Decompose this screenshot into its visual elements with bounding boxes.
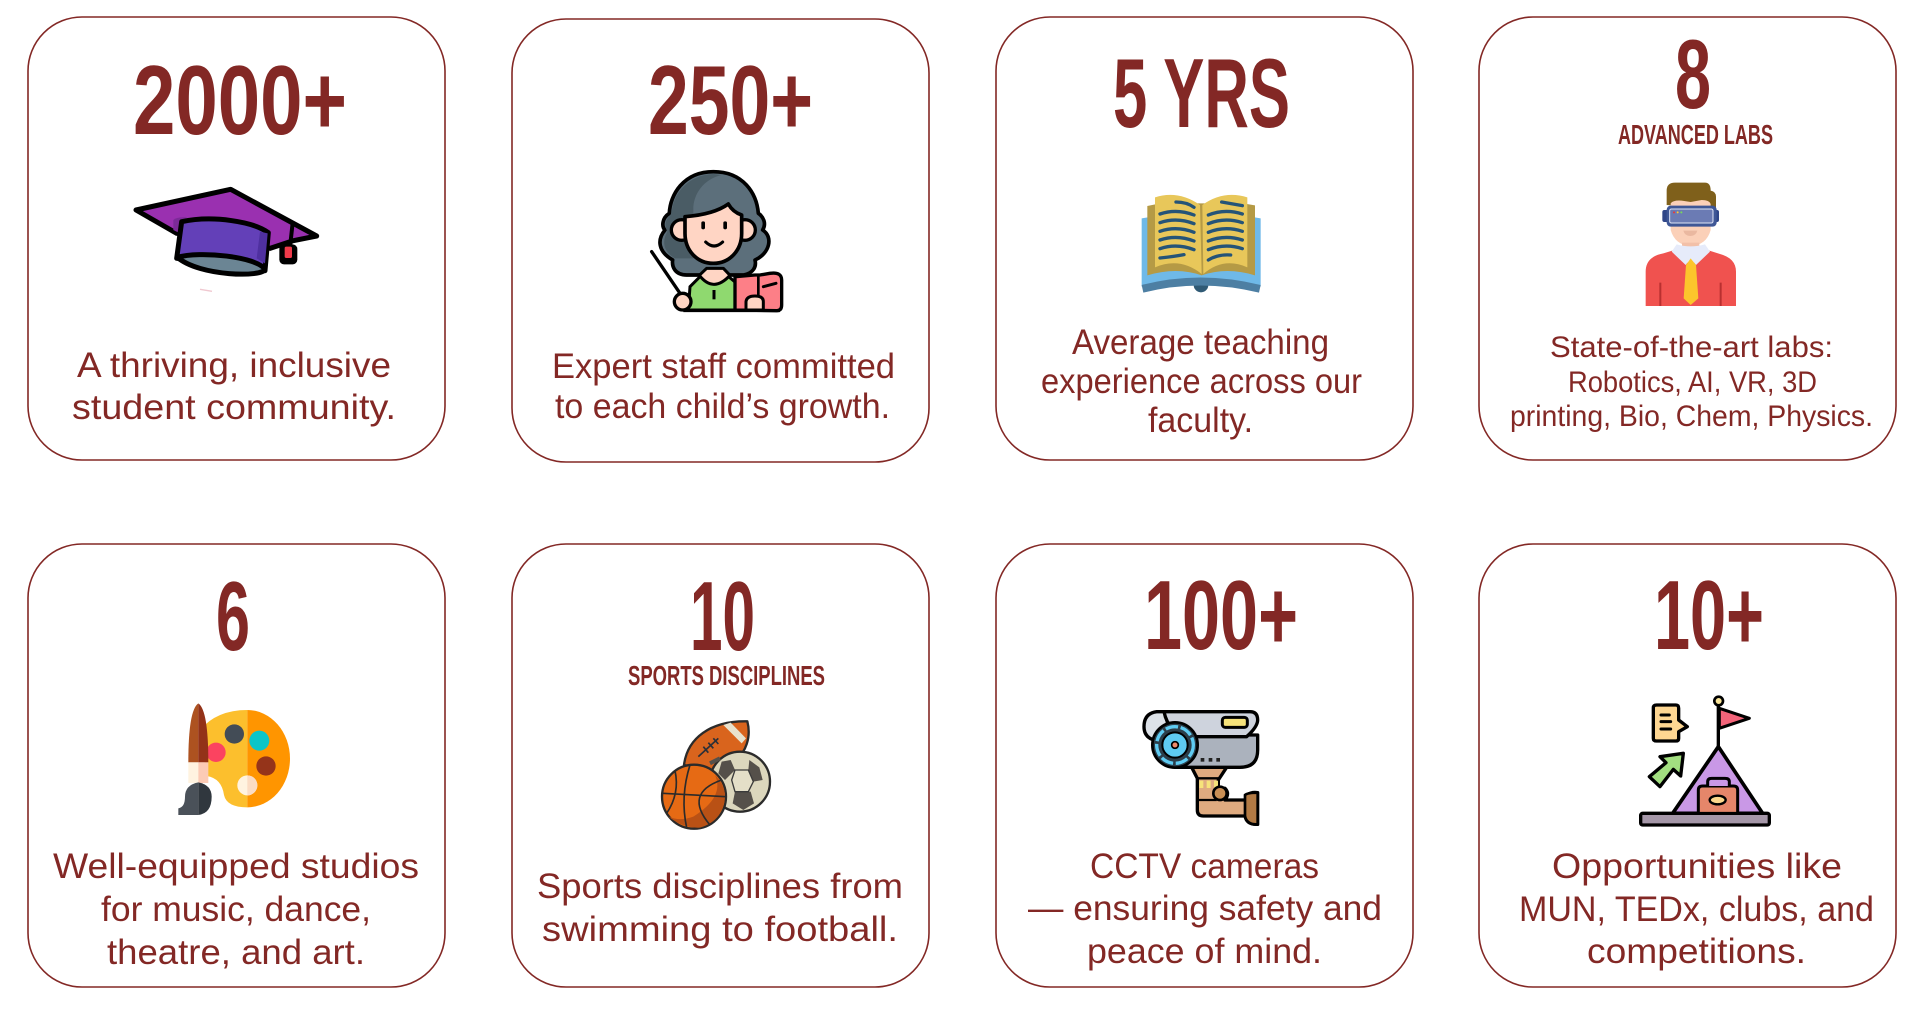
stat: 100+: 100+ bbox=[1144, 560, 1298, 670]
stat: 10+: 10+ bbox=[1654, 560, 1764, 670]
description: staff: to each child’s growth. bbox=[555, 387, 890, 426]
panel: teaching experience bbox=[996, 17, 1413, 460]
description: opportunities bbox=[1519, 847, 1874, 971]
icon: summit with flag bbox=[1641, 697, 1769, 825]
panel: sports bbox=[512, 544, 929, 987]
description: studios: for music, dance, bbox=[101, 890, 371, 929]
panel: staff bbox=[512, 19, 929, 462]
description: studios bbox=[53, 847, 419, 972]
panel: labs bbox=[1479, 17, 1896, 460]
description: CCTV bbox=[1028, 847, 1382, 971]
subheading: advanced labs: ADVANCED LABS bbox=[1618, 119, 1773, 150]
icon: palette and brush bbox=[178, 703, 290, 815]
description: CCTV: peace of mind. bbox=[1087, 932, 1322, 971]
panel: CCTV bbox=[996, 544, 1413, 987]
panel: opportunities bbox=[1479, 544, 1896, 987]
description: students bbox=[72, 346, 396, 427]
description: staff: Expert staff committed bbox=[552, 347, 895, 386]
description: labs: State-of-the-art labs: bbox=[1550, 331, 1833, 364]
description: CCTV: — ensuring safety and bbox=[1028, 889, 1382, 928]
icon: CCTV camera bbox=[1144, 712, 1258, 824]
description: opportunities: Opportunities like bbox=[1552, 847, 1842, 886]
stat: 2000+: 2000+ bbox=[133, 45, 347, 155]
stat: 250+: 250+ bbox=[648, 45, 813, 155]
description: teaching experience: faculty. bbox=[1148, 401, 1253, 440]
description: CCTV: CCTV cameras bbox=[1090, 847, 1319, 886]
icon: sports balls bbox=[662, 721, 770, 829]
panel: students bbox=[28, 17, 445, 460]
panel: studios bbox=[28, 544, 445, 987]
icon: graduation cap bbox=[136, 189, 317, 291]
icon: teacher bbox=[652, 172, 782, 311]
icon: open book bbox=[1142, 195, 1261, 293]
description: staff bbox=[552, 347, 895, 426]
description: studios: Well-equipped studios bbox=[53, 847, 419, 886]
description: students: student community. bbox=[72, 388, 396, 427]
description: studios: theatre, and art. bbox=[107, 933, 365, 972]
description: opportunities: competitions. bbox=[1587, 932, 1806, 971]
description: sports bbox=[537, 867, 903, 949]
subheading: sports disciplines: SPORTS DISCIPLINES bbox=[628, 660, 825, 691]
description: teaching experience bbox=[1041, 323, 1362, 440]
icon: VR headset man bbox=[1646, 183, 1736, 306]
description: labs: printing, Bio, Chem, Physics. bbox=[1510, 400, 1873, 433]
description: labs bbox=[1510, 331, 1873, 433]
description: students: A thriving, inclusive bbox=[77, 346, 391, 385]
description: teaching experience: Average teaching bbox=[1072, 323, 1329, 362]
stat: 10: 10 bbox=[690, 561, 755, 671]
description: labs: Robotics, AI, VR, 3D bbox=[1568, 366, 1817, 399]
stat: 6: 6 bbox=[216, 561, 250, 671]
description: teaching experience: experience across our bbox=[1041, 362, 1362, 401]
stat: 5 YRS: 5 YRS bbox=[1113, 38, 1290, 148]
stat: 8: 8 bbox=[1675, 19, 1711, 129]
description: sports: Sports disciplines from bbox=[537, 867, 903, 906]
description: opportunities: MUN, TEDx, clubs, and bbox=[1519, 890, 1874, 929]
description: sports: swimming to football. bbox=[542, 910, 898, 949]
